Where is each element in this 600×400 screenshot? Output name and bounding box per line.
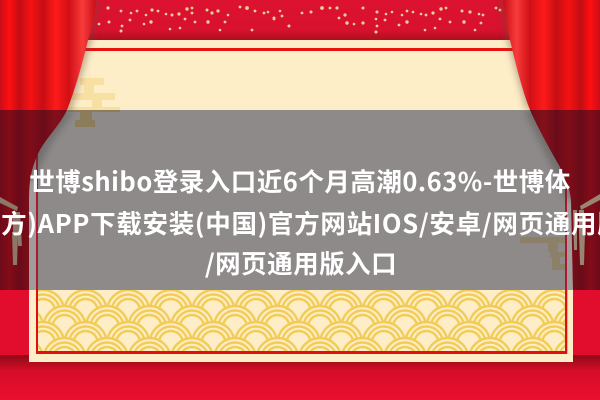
inner panel tint behind overlay (29, 110, 573, 290)
right frame strip in band (567, 150, 573, 290)
red top band (0, 0, 600, 40)
right rule in band (565, 150, 567, 290)
left rule in band (36, 150, 38, 290)
left tassel (0, 197, 22, 265)
left curtain (0, 0, 100, 290)
cream frame (29, 40, 573, 362)
title line 1: 世博shibo登录入口近6个月高潮0.63%-世博体 (29, 162, 571, 199)
scallop wave pattern (38, 290, 565, 351)
bottom red rule (36, 351, 567, 354)
left red rule (36, 290, 38, 354)
top red rule (29, 48, 573, 51)
right curtain (499, 0, 600, 290)
gold confetti (98, 6, 501, 33)
dark title overlay band (0, 110, 600, 290)
left frame strip in band (29, 150, 36, 290)
decorative gold cloud right (520, 237, 566, 270)
title line 3: /网页通用版入口 (205, 244, 397, 281)
curtains (0, 0, 600, 290)
decorative gold cloud left (68, 78, 120, 127)
right red rule (565, 290, 567, 354)
right tassel (573, 194, 600, 265)
